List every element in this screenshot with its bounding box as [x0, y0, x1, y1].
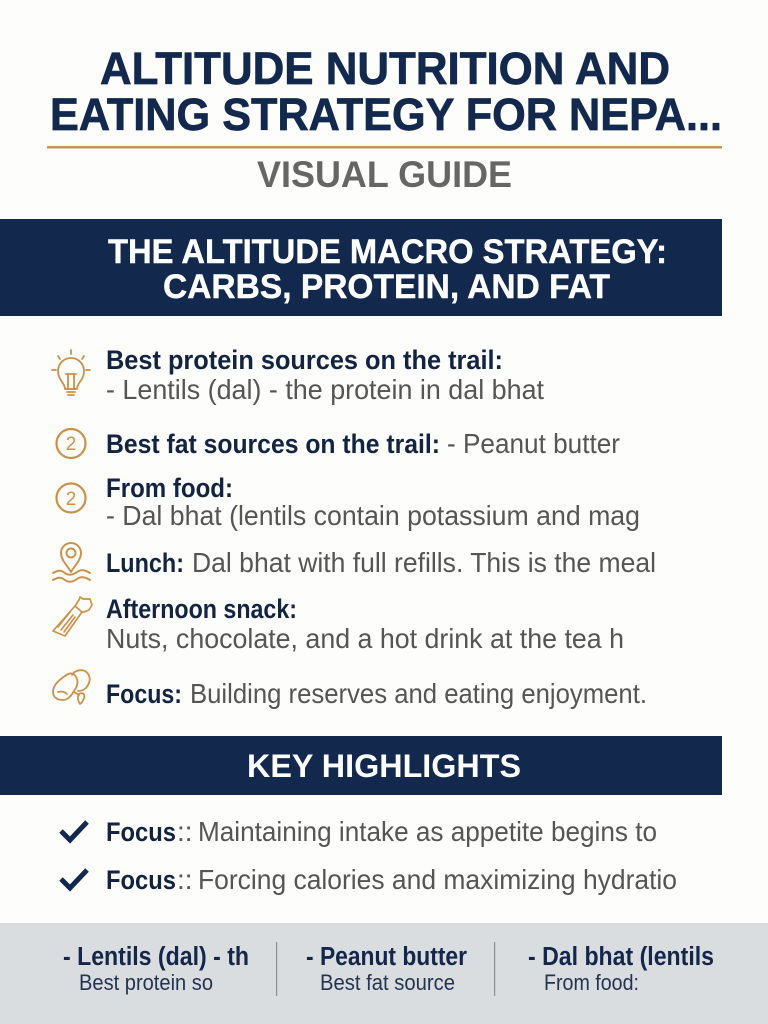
highlight: maintaining intake: Focus	[106, 817, 176, 847]
icon: arm and fist	[53, 597, 92, 636]
item: lunch: Dal bhat with full refills. This is the meal	[192, 547, 656, 578]
footer stat: food: From food:	[544, 970, 639, 995]
item: afternoon snack: Afternoon snack:	[106, 594, 297, 624]
footer stat: fat: - Peanut butter	[306, 943, 467, 971]
item: afternoon snack	[106, 594, 624, 654]
icon: number circle 2 second: 2	[66, 489, 76, 510]
icon: check mark	[61, 822, 87, 840]
item: focus: Building reserves and eating enjoyment.	[190, 678, 647, 709]
highlight: maintaining intake: Maintaining intake as appetite begins to	[198, 816, 657, 847]
highlight: forcing calories: Forcing calories and maximizing hydratio	[198, 864, 677, 895]
item: protein sources: Best protein sources on the trail:	[106, 345, 503, 375]
highlight: maintaining intake: ::	[177, 816, 193, 847]
item: from food: - Dal bhat (lentils contain potassium and mag	[106, 500, 640, 531]
icon: number circle 2	[56, 429, 86, 458]
icon: number circle 2: 2	[66, 434, 76, 455]
section banner: key highlights: KEY HIGHLIGHTS	[247, 748, 521, 784]
footer stat: fat: Best fat source	[320, 970, 455, 995]
footer stat: protein: Best protein so	[79, 970, 213, 995]
highlight: forcing calories: Focus	[106, 865, 176, 895]
highlight: forcing calories: ::	[177, 864, 193, 895]
list: macro strategy items	[52, 345, 656, 709]
footer stat: fat	[306, 943, 467, 995]
icon: map pin with waves	[53, 543, 90, 582]
title: EATING STRATEGY FOR NEPA...	[50, 89, 722, 140]
item: afternoon snack: Nuts, chocolate, and a hot drink at the tea h	[106, 623, 624, 654]
icon: nuts	[53, 670, 90, 704]
item: fat sources: - Peanut butter	[447, 428, 620, 459]
item: focus: Focus:	[106, 679, 182, 709]
footer stat: food: - Dal bhat (lentils	[528, 943, 714, 971]
section banner: macro strategy	[0, 219, 722, 316]
item: protein sources	[106, 345, 544, 405]
title: ALTITUDE NUTRITION AND	[100, 43, 670, 94]
title	[50, 43, 722, 140]
item: protein sources: - Lentils (dal) - the protein in dal bhat	[106, 374, 544, 405]
section banner: macro strategy: CARBS, PROTEIN, AND FAT	[163, 268, 610, 306]
icon: light bulb	[52, 350, 90, 395]
item: from food	[106, 473, 640, 531]
footer stat: protein	[63, 943, 249, 995]
item: lunch: Lunch:	[106, 548, 184, 578]
item: fat sources: Best fat sources on the trail:	[106, 429, 440, 459]
icon: check mark second	[61, 870, 87, 888]
subtitle: VISUAL GUIDE	[257, 154, 512, 195]
icon: number circle 2 second	[56, 484, 86, 512]
footer stat: protein: - Lentils (dal) - th	[63, 943, 249, 971]
footer panel	[0, 923, 768, 1024]
list: key highlights	[61, 816, 677, 895]
item: fat sources	[106, 428, 620, 459]
section banner: macro strategy: THE ALTITUDE MACRO STRATEGY:	[108, 233, 667, 271]
footer stat: food	[528, 943, 714, 995]
section banner: key highlights	[0, 736, 722, 795]
item: from food: From food:	[106, 473, 233, 503]
